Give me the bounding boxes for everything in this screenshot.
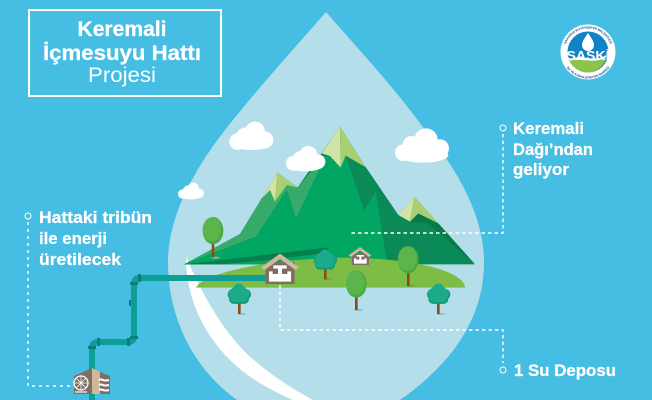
dashed connector: turbine xyxy=(28,222,74,386)
logo ring text xyxy=(564,26,613,78)
logo ring text: SAKARYA BÜYÜKŞEHİR BELEDİYESİ xyxy=(564,26,613,44)
label: mountain source xyxy=(513,119,593,179)
label: water tank: 1 Su Deposu xyxy=(514,361,616,380)
mountain light face xyxy=(184,155,330,264)
logo: SASKİ xyxy=(560,24,616,80)
main peak snow xyxy=(322,127,366,168)
label: turbine energy: ile enerji xyxy=(39,229,107,248)
marker: water tank connector xyxy=(500,367,506,373)
label: mountain source: Dağı’ndan xyxy=(513,140,593,159)
water drop background xyxy=(168,12,484,400)
tree: centre oval xyxy=(346,270,367,311)
logo ring text: SU VE KANALİZASYON İDARESİ xyxy=(566,66,610,78)
title text xyxy=(43,18,201,87)
pipe joints xyxy=(88,274,141,349)
cloud: top left xyxy=(229,122,273,150)
cloud: centre xyxy=(286,146,325,171)
label: mountain source: geliyor xyxy=(513,160,569,179)
water tank building xyxy=(261,254,299,284)
mountains and island scene xyxy=(184,127,475,315)
mountain main face xyxy=(184,156,387,264)
tree: round on island xyxy=(314,249,337,280)
marker: mountain connector xyxy=(500,125,506,131)
mountain dark wedge left xyxy=(184,247,328,264)
tree: round lower right xyxy=(427,284,450,315)
turbine building icon xyxy=(74,368,110,394)
cloud: small left xyxy=(178,183,204,199)
right peak snow xyxy=(398,197,438,223)
marker: turbine connector xyxy=(25,213,31,219)
label: turbine energy xyxy=(39,208,152,269)
tree: round lower left xyxy=(228,284,251,315)
pipeline to water tank xyxy=(92,278,272,400)
tree: right oval xyxy=(398,246,419,287)
label: turbine energy: Hattaki tribün xyxy=(39,208,152,227)
mountain silhouette xyxy=(184,127,475,264)
title text: Keremali xyxy=(78,18,166,41)
logo: SASKİ: SASKİ xyxy=(566,48,610,63)
title text: İçmesuyu Hattı xyxy=(43,42,201,65)
cloud: right xyxy=(395,128,449,163)
dashed connector: water tank xyxy=(280,285,503,363)
clouds xyxy=(178,122,449,199)
island xyxy=(196,258,465,288)
white crescent highlight on the drop xyxy=(186,257,313,400)
left peak snow xyxy=(262,173,298,202)
dashed connector: mountain xyxy=(351,134,503,233)
title text: Projesi xyxy=(88,64,156,87)
tree: far left oval xyxy=(203,217,223,259)
mountain dark shadow right xyxy=(410,213,475,264)
title box xyxy=(29,10,221,96)
label: turbine energy: üretilecek xyxy=(39,250,122,269)
label: mountain source: Keremali xyxy=(513,119,584,138)
small house xyxy=(349,247,371,265)
